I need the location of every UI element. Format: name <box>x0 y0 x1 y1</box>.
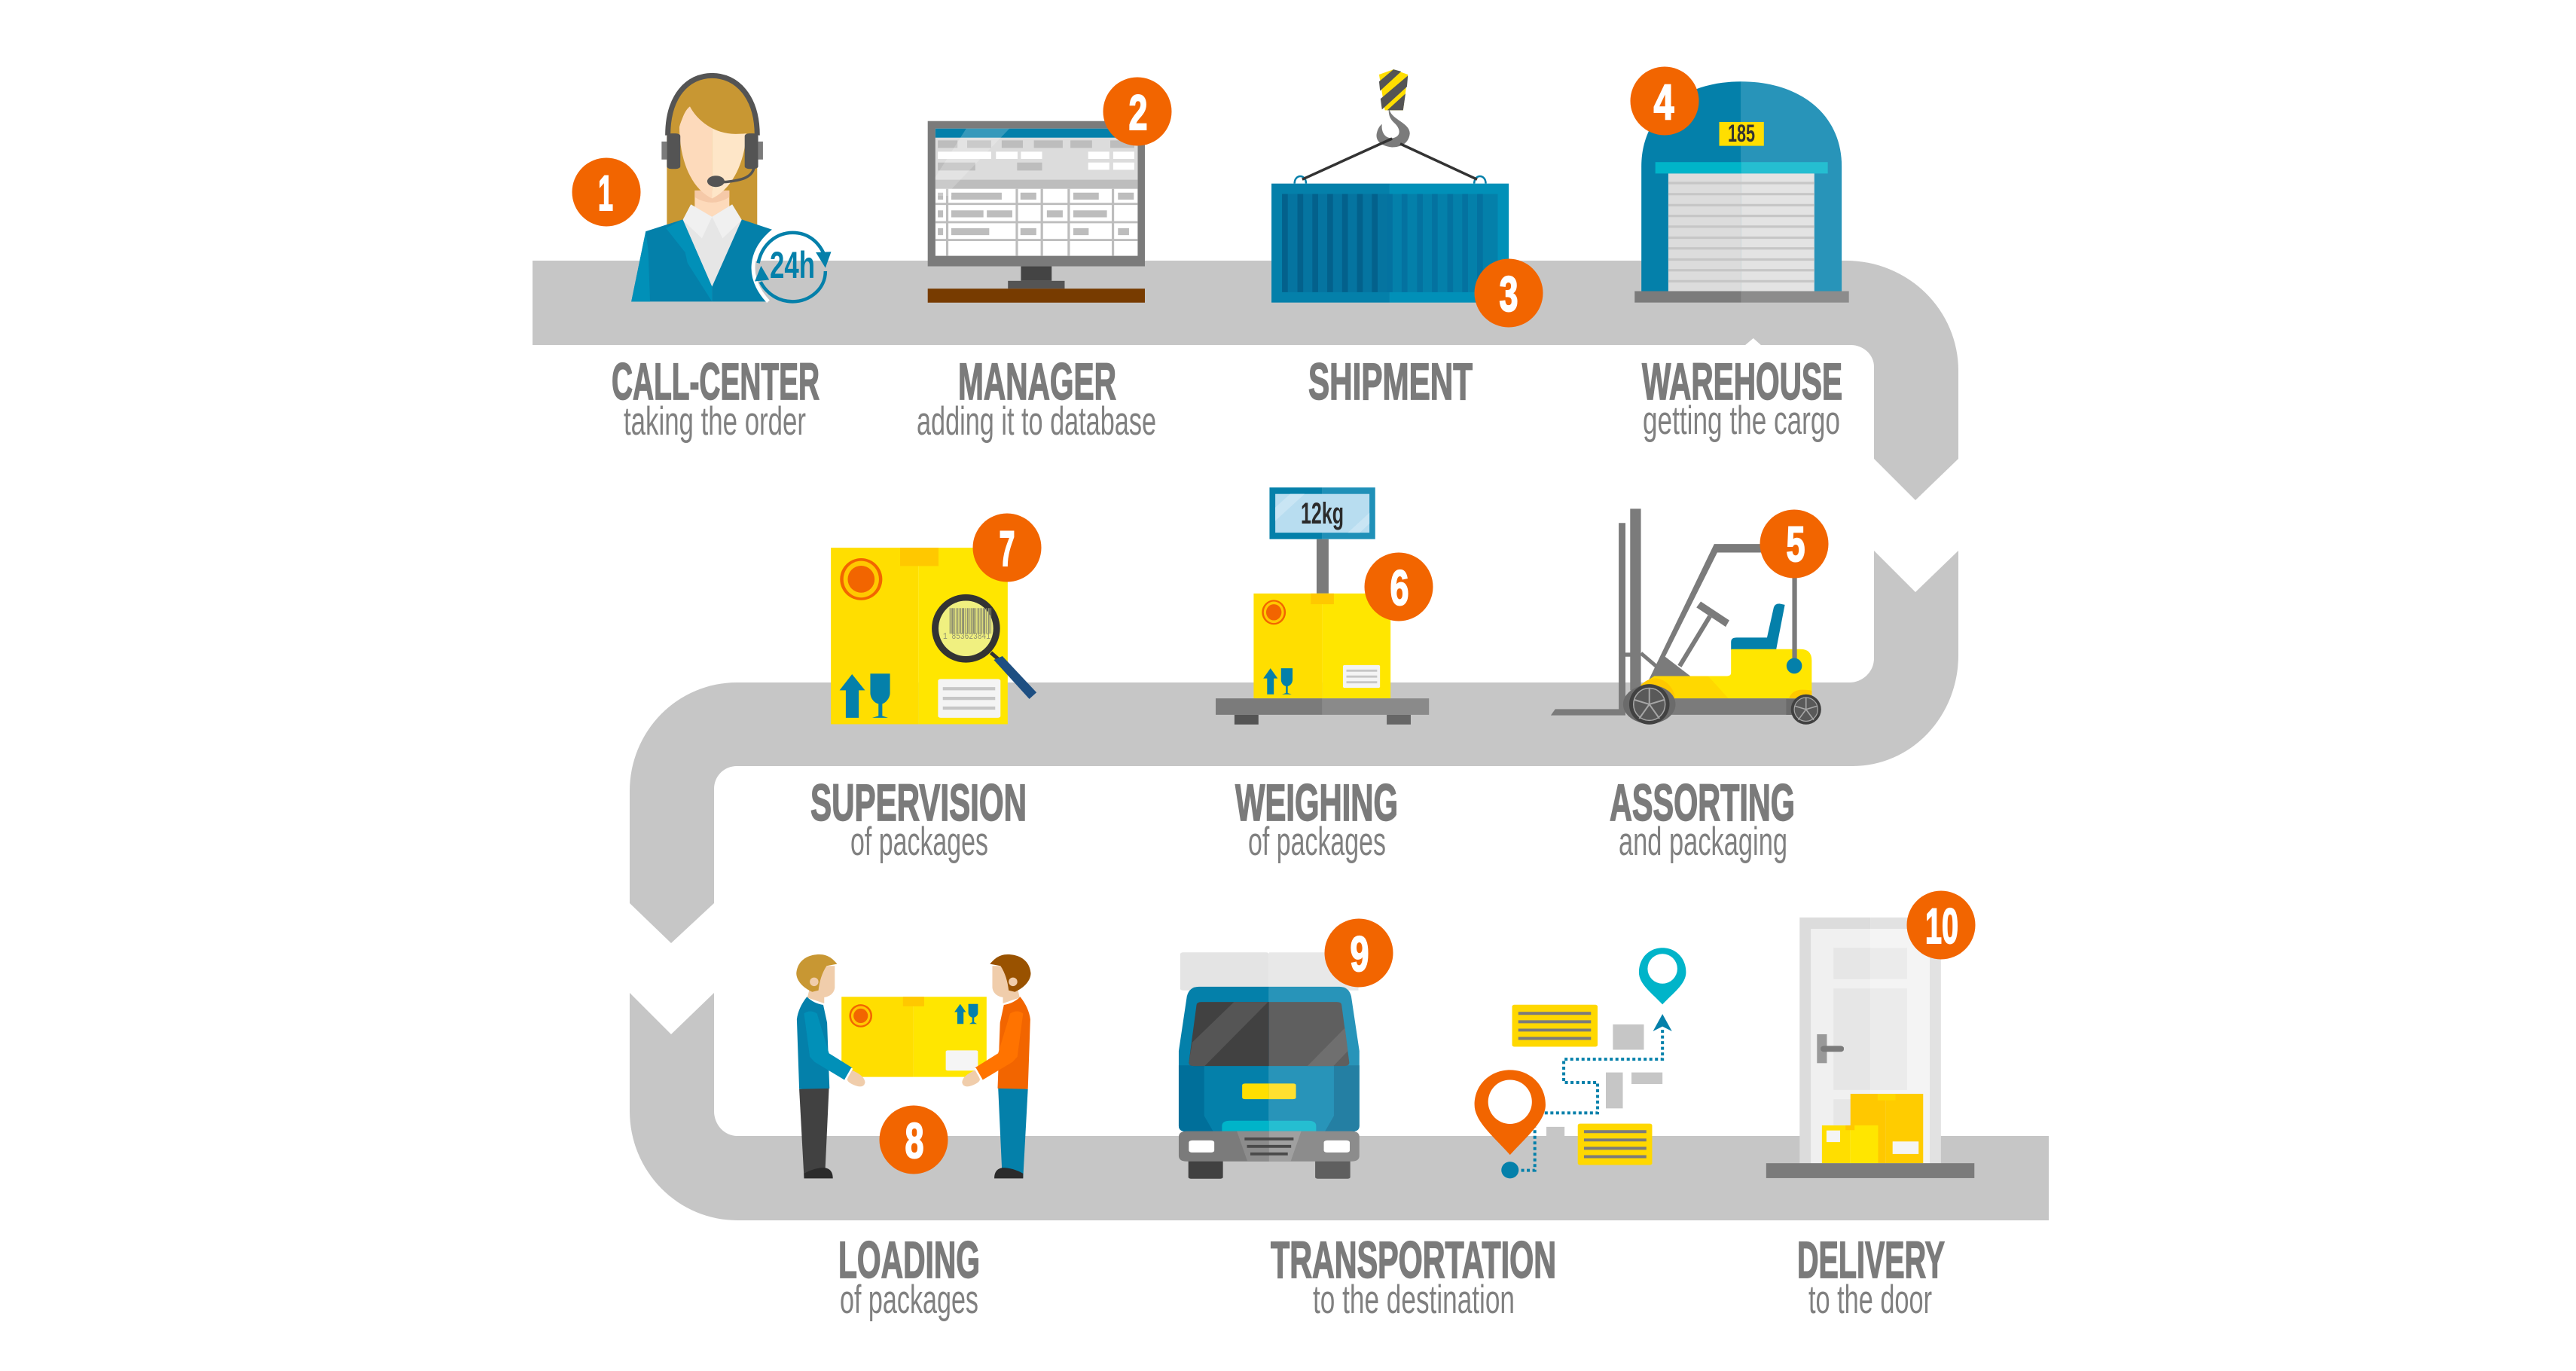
number badge 10 <box>1907 890 1975 960</box>
number badge 3 <box>1475 259 1543 327</box>
heading: loading: LOADING <box>838 1231 980 1289</box>
panel: step 3 shipment <box>1271 69 1543 411</box>
icon: parcel under magnifying glass: 1 853623841 <box>943 631 990 642</box>
number badge 3: 3 <box>1499 266 1518 322</box>
panel: step 6 weighing <box>1216 487 1433 864</box>
panel: step 5 assorting <box>1551 508 1829 864</box>
icon: crane hook lifting container <box>1271 69 1509 303</box>
subtext: of packages: of packages <box>1248 820 1386 864</box>
icon: door with delivered boxes <box>1766 918 1974 1178</box>
icon: route map with location pins <box>1475 948 1686 1178</box>
subtext: taking the order: taking the order <box>624 399 806 444</box>
serpentine road: bottom segment <box>630 993 2049 1220</box>
icon: call-center agent with headset: 24h <box>770 244 815 286</box>
number badge 6: 6 <box>1390 560 1409 615</box>
icon: desktop monitor with database table <box>928 121 1145 303</box>
heading: weighing: WEIGHING <box>1235 774 1398 832</box>
number badge 2 <box>1103 77 1172 146</box>
number badge 1: 1 <box>598 165 613 221</box>
heading: warehouse: WAREHOUSE <box>1642 353 1842 411</box>
heading: assorting: ASSORTING <box>1610 774 1795 832</box>
number badge 5: 5 <box>1787 516 1805 572</box>
number badge 4 <box>1630 66 1699 136</box>
icon: warehouse with roller door: 185 <box>1728 120 1755 147</box>
subtext: to the door: to the door <box>1808 1278 1932 1322</box>
icon: parcel on weighing scale <box>1216 487 1429 725</box>
panel: step 9 transportation <box>1179 919 1686 1322</box>
icon: call-center agent with headset <box>631 75 831 301</box>
heading: delivery: DELIVERY <box>1797 1231 1945 1289</box>
worker right <box>962 954 1031 1178</box>
subtext: of packages: of packages <box>850 820 988 864</box>
panel: step 10 delivery <box>1766 890 1975 1322</box>
icon: warehouse with roller door <box>1634 81 1849 345</box>
number badge 8 <box>880 1106 948 1174</box>
heading: manager: MANAGER <box>958 353 1116 411</box>
icon: forklift <box>1551 508 1821 725</box>
panel: step 4 warehouse <box>1630 66 1849 443</box>
worker left <box>796 954 865 1178</box>
heading: call-center: CALL-CENTER <box>612 353 819 411</box>
number badge 7: 7 <box>999 521 1015 576</box>
number badge 1 <box>572 158 640 226</box>
icon: delivery truck front view <box>1179 952 1360 1179</box>
subtext: of packages: of packages <box>840 1278 978 1322</box>
heading: transportation: TRANSPORTATION <box>1271 1231 1556 1289</box>
number badge 8: 8 <box>905 1113 923 1168</box>
heading: supervision: SUPERVISION <box>810 774 1027 832</box>
number badge 9 <box>1324 919 1393 987</box>
number badge 9: 9 <box>1350 926 1369 982</box>
serpentine road: middle segment with arrow <box>630 551 1958 943</box>
icon: parcel on weighing scale: 12kg <box>1301 497 1344 530</box>
number badge 10: 10 <box>1925 898 1958 954</box>
subtext: adding it to database: adding it to database <box>917 399 1156 444</box>
panel: step 2 manager <box>917 77 1172 444</box>
number badge 4: 4 <box>1654 74 1674 130</box>
panel: step 8 loading <box>796 954 1031 1322</box>
number badge 5 <box>1760 509 1829 579</box>
number badge 6 <box>1365 553 1433 621</box>
number badge 2: 2 <box>1128 84 1148 140</box>
number badge 7 <box>973 514 1041 582</box>
icon: parcel under magnifying glass <box>831 548 1036 724</box>
serpentine road: top segment with arrow <box>533 261 1958 500</box>
panel: step 7 supervision <box>810 514 1041 864</box>
panel: step 1 call-center <box>572 75 831 444</box>
subtext: getting the cargo: getting the cargo <box>1643 398 1840 443</box>
icon: two workers carrying a parcel <box>796 954 1031 1178</box>
subtext: and packaging: and packaging <box>1619 820 1787 864</box>
subtext: to the destination: to the destination <box>1313 1278 1515 1322</box>
heading: shipment: SHIPMENT <box>1308 353 1473 411</box>
